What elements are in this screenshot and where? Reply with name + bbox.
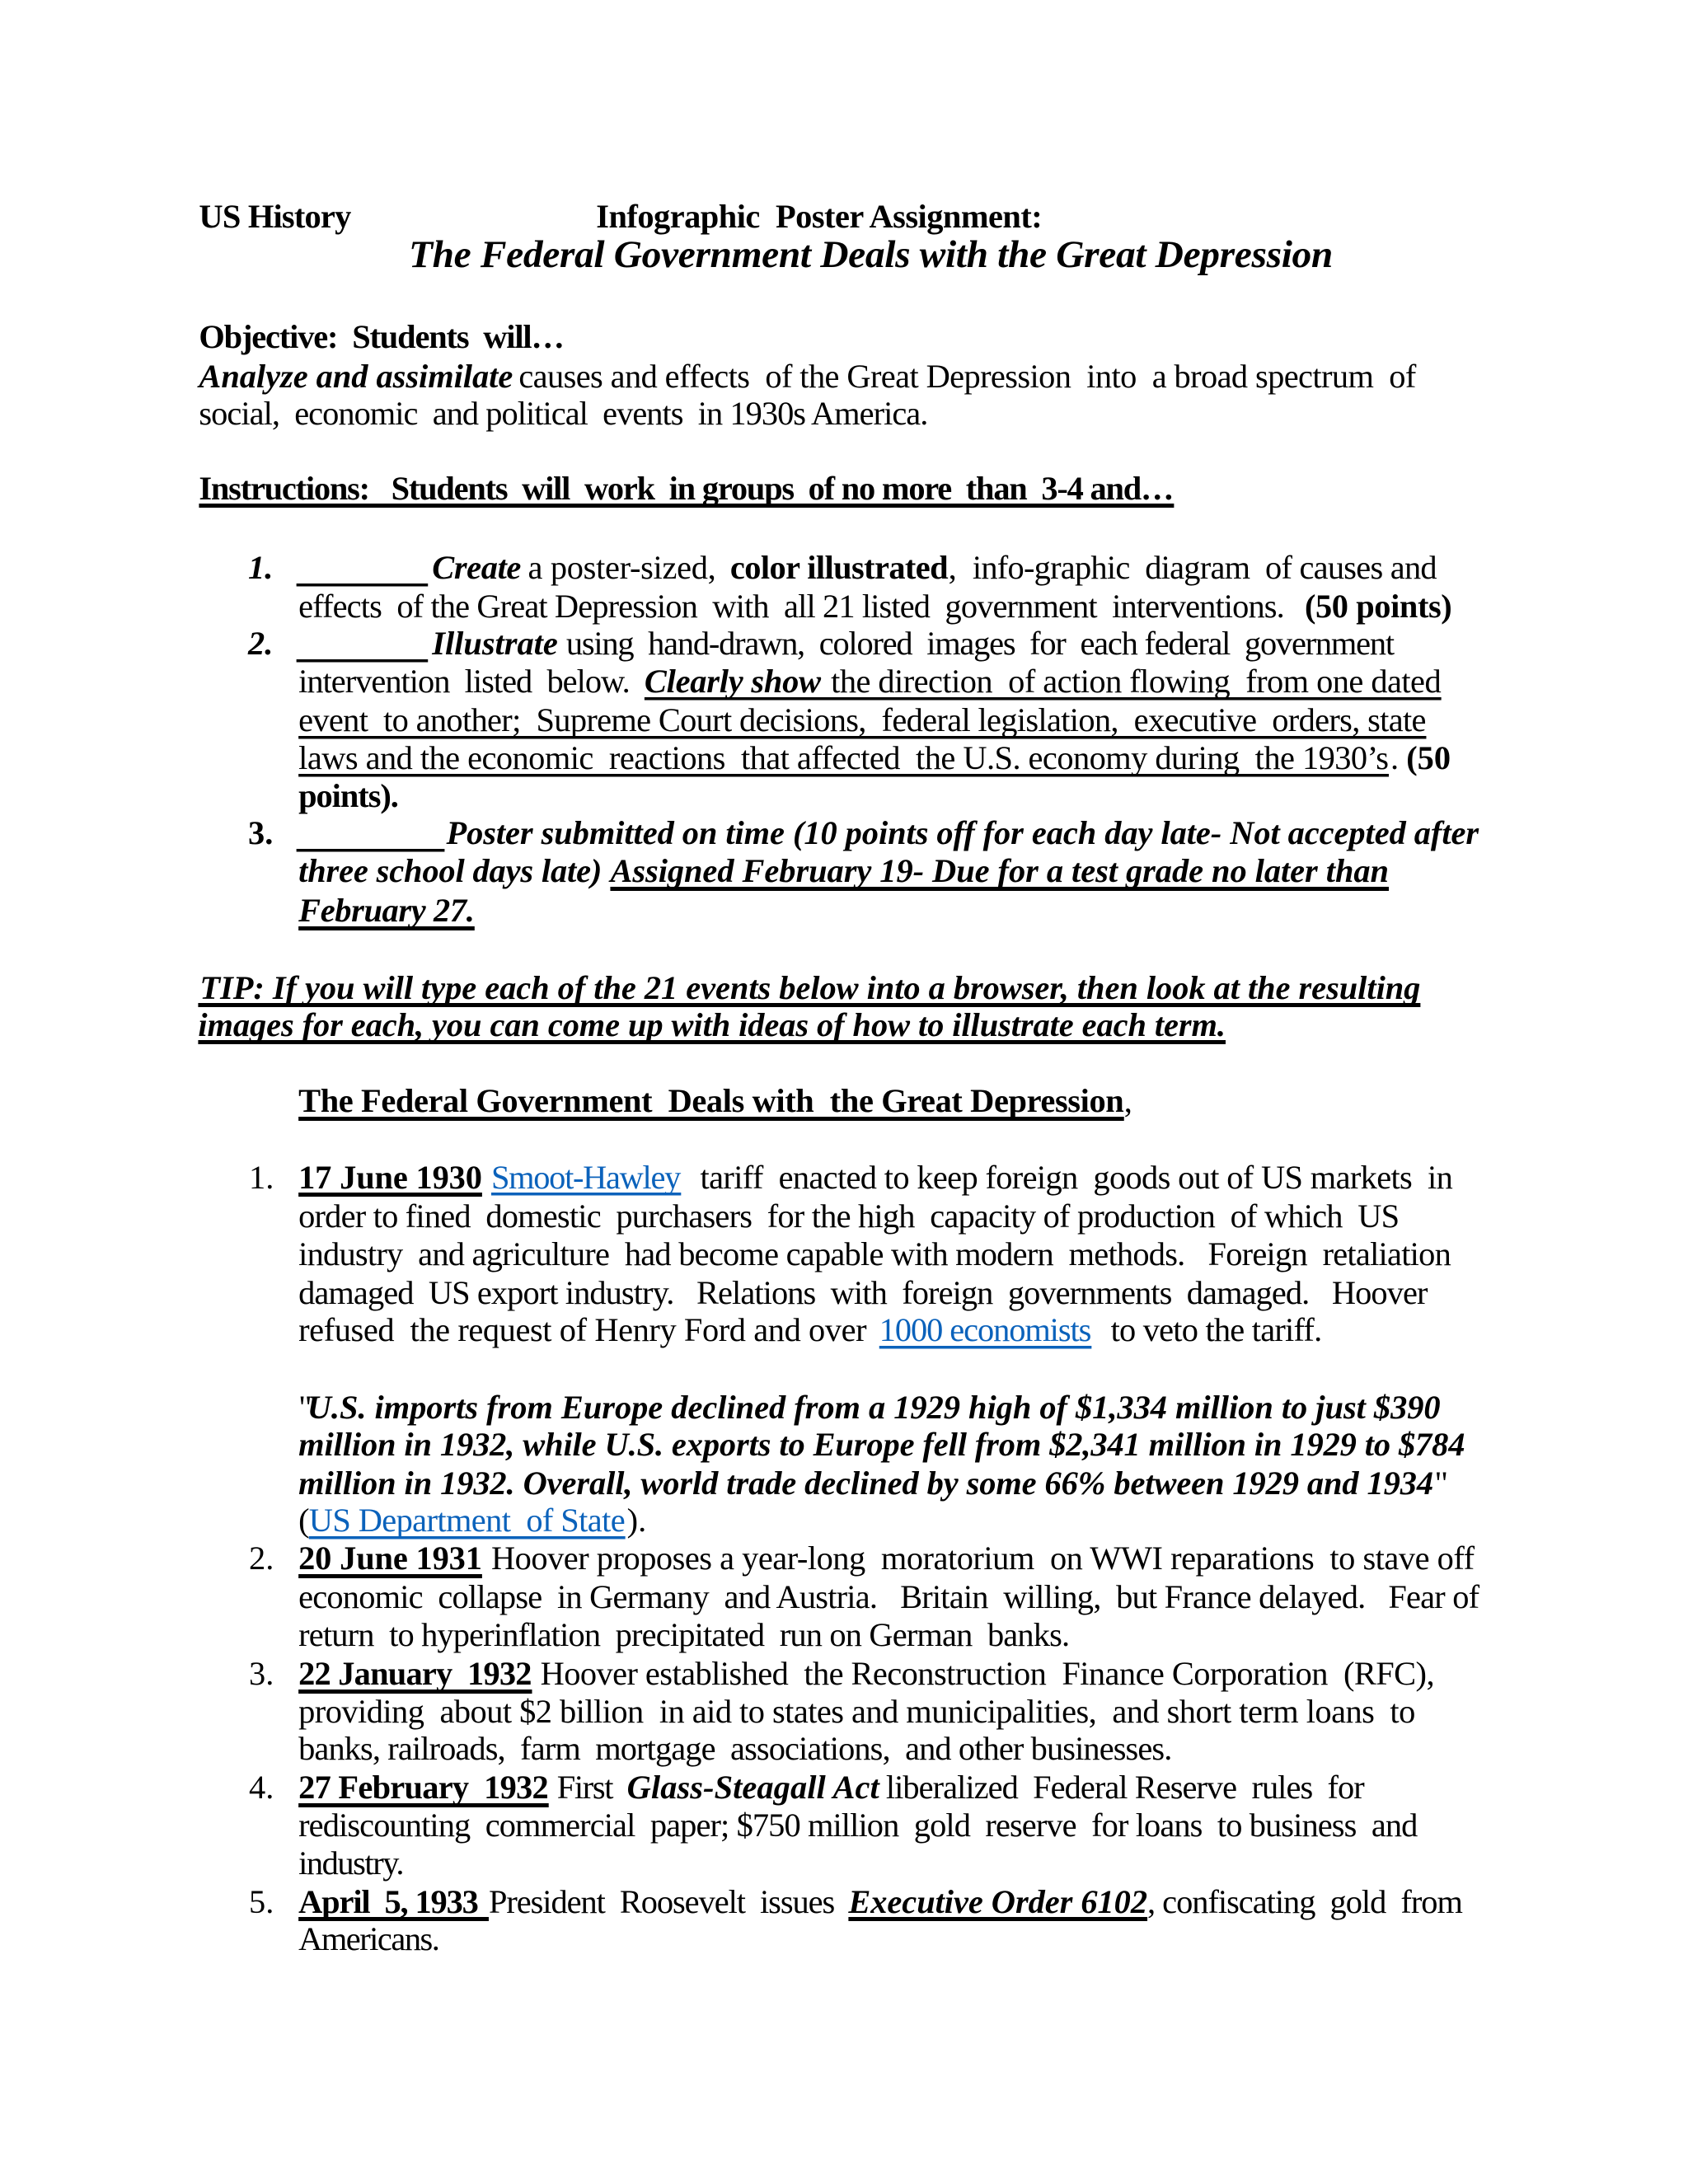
tip callout: images for each, you can come up with ideas of how to illustrate each term.: [198, 1006, 1226, 1043]
event 2: Hoover moratorium: 2.: [249, 1540, 274, 1577]
event 2: Hoover moratorium: 20 June 1931: [298, 1540, 482, 1577]
event 4: Glass-Steagall Act: Glass-Steagall Act: [627, 1769, 881, 1806]
instruction 2: illustrate events: laws and the economic reactions that affected the U.S. economy during the 1930’s: [298, 739, 1389, 776]
tip callout: [198, 969, 1420, 1044]
instruction 1: create poster: [248, 549, 1452, 625]
instruction 2: illustrate events: 2.: [247, 625, 273, 662]
event 1: Smoot-Hawley tariff: 1000 economists: [879, 1311, 1091, 1348]
event 3: Reconstruction Finance Corporation: banks, railroads, farm mortgage associations, and other businesses.: [298, 1730, 1172, 1767]
event 5: Executive Order 6102: President Roosevelt issues: [489, 1883, 835, 1920]
event 1: Smoot-Hawley tariff: order to fined domestic purchasers for the high capacity of production of which US: [298, 1197, 1400, 1235]
event 1: Smoot-Hawley tariff: industry and agriculture had become capable with modern methods. Foreign retaliation: [298, 1235, 1451, 1272]
event 1: Smoot-Hawley tariff: refused the request of Henry Ford and over: [298, 1311, 867, 1348]
tip callout: TIP: If you will type each of the 21 events below into a browser, then look at the resulting: [199, 969, 1420, 1006]
event 1: Smoot-Hawley tariff: damaged US export industry. Relations with foreign governments damaged. Hoover: [298, 1274, 1428, 1311]
page content: [196, 198, 1480, 1957]
instruction 2: illustrate events: event to another; Supreme Court decisions, federal legislation, executive orders, state: [298, 701, 1426, 738]
event 2: Hoover moratorium: return to hyperinflation precipitated run on German banks.: [298, 1616, 1070, 1653]
instruction 2: illustrate events: Clearly show: [645, 663, 821, 700]
instruction 2: illustrate events: Illustrate: [431, 625, 558, 662]
instructions heading: Instructions: Students will work in groups of no more than 3-4 and…: [199, 470, 1174, 507]
instruction 2: illustrate events: using hand-drawn, colored images for each federal government: [566, 625, 1395, 662]
quotation: trade statistics: million in 1932. Overall, world trade declined by some 66% between 1929 and 1934: [298, 1465, 1433, 1502]
instruction 2: illustrate events: [247, 625, 1451, 814]
quotation: trade statistics: million in 1932, while U.S. exports to Europe fell from $2,341 million in 1929 to $784: [298, 1426, 1465, 1463]
instruction 1: create poster: 1.: [248, 549, 273, 586]
instruction 1: create poster: Create: [432, 549, 521, 586]
quotation: trade statistics: US Department of State: [309, 1502, 626, 1539]
list heading: The Federal Government Deals with the Great Depression: [298, 1082, 1124, 1119]
event 2: Hoover moratorium: Hoover proposes a year-long moratorium on WWI reparations to stave off: [491, 1540, 1475, 1577]
header: course and assignment title: Infographic Poster Assignment:: [596, 198, 1043, 235]
header: course and assignment title: US History: [199, 198, 351, 235]
event 4: Glass-Steagall Act: [249, 1769, 1418, 1882]
event 1: Smoot-Hawley tariff: to veto the tariff.: [1111, 1311, 1322, 1348]
objective section: social, economic and political events in 1930s America.: [199, 395, 928, 432]
event 4: Glass-Steagall Act: 4.: [249, 1769, 274, 1806]
event 5: Executive Order 6102: Executive Order 6102: [847, 1883, 1147, 1920]
quotation: trade statistics: ).: [627, 1502, 646, 1539]
instruction 1: create poster: info-graphic diagram of causes and: [973, 549, 1437, 586]
instruction 2: illustrate events: points).: [298, 777, 399, 814]
instruction 1: create poster: (50 points): [1305, 588, 1452, 625]
instruction 2: illustrate events: the direction of action flowing from one dated: [831, 663, 1442, 700]
event 2: Hoover moratorium: [249, 1540, 1480, 1653]
instruction 2: illustrate events: intervention listed below.: [298, 663, 631, 700]
event 3: Reconstruction Finance Corporation: 22 January 1932: [298, 1655, 532, 1692]
instruction 2: illustrate events: (50: [1406, 739, 1451, 776]
instruction 1: create poster: color illustrated: [730, 549, 949, 586]
instruction 3: deadline: 3.: [248, 814, 273, 851]
event 3: Reconstruction Finance Corporation: [249, 1655, 1435, 1767]
list heading: ,: [1124, 1082, 1132, 1119]
instruction 3: deadline: February 27.: [298, 892, 475, 929]
objective section: Analyze and assimilate: [196, 358, 513, 395]
quotation: trade statistics: ": [1435, 1465, 1448, 1502]
event 5: Executive Order 6102: 5.: [249, 1883, 274, 1920]
instruction 3: deadline: Assigned February 19- Due for a test grade no later than: [607, 852, 1389, 889]
quotation: trade statistics: (: [298, 1502, 310, 1539]
objective section: causes and effects of the Great Depression into a broad spectrum of: [518, 358, 1417, 395]
quotation: trade statistics: ": [298, 1389, 312, 1426]
event 1: Smoot-Hawley tariff: 17 June 1930: [298, 1159, 482, 1196]
event 3: Reconstruction Finance Corporation: Hoover established the Reconstruction Finance Corporation (RFC),: [541, 1655, 1435, 1692]
event 4: Glass-Steagall Act: industry.: [298, 1844, 404, 1882]
instruction 2: illustrate events: .: [1390, 739, 1399, 776]
instruction 1: create poster: a poster-sized,: [528, 549, 716, 586]
quotation: trade statistics: [298, 1389, 1465, 1540]
objective section: Objective: Students will…: [199, 318, 565, 355]
instruction 3: deadline: [248, 814, 1479, 930]
event 5: Executive Order 6102: April 5, 1933: [298, 1883, 479, 1920]
event 3: Reconstruction Finance Corporation: 3.: [249, 1655, 274, 1692]
objective section: [196, 318, 1417, 432]
event 3: Reconstruction Finance Corporation: providing about $2 billion in aid to states and municipalities, and short term loans to: [298, 1693, 1415, 1730]
event 1: Smoot-Hawley tariff: 1.: [249, 1159, 274, 1196]
event 5: Executive Order 6102: , confiscating gold from: [1147, 1883, 1463, 1920]
event 1: Smoot-Hawley tariff: Smoot-Hawley: [491, 1159, 681, 1196]
quotation: trade statistics: U.S. imports from Europe declined from a 1929 high of $1,334 million to just $390: [307, 1389, 1441, 1426]
event 5: Executive Order 6102: [249, 1883, 1463, 1957]
instruction 3: deadline: three school days late): [298, 852, 602, 889]
event 1: Smoot-Hawley tariff: tariff enacted to keep foreign goods out of US markets in: [701, 1159, 1453, 1196]
event 4: Glass-Steagall Act: liberalized Federal Reserve rules for: [886, 1769, 1365, 1806]
header: course and assignment title: [199, 198, 1333, 276]
event 5: Executive Order 6102: Americans.: [298, 1920, 440, 1957]
event 4: Glass-Steagall Act: rediscounting commercial paper; $750 million gold reserve for loans to business and: [298, 1807, 1418, 1844]
event 4: Glass-Steagall Act: First: [557, 1769, 613, 1806]
event 1: Smoot-Hawley tariff: [249, 1159, 1453, 1348]
instruction 1: create poster: effects of the Great Depression with all 21 listed government interventions.: [298, 588, 1285, 625]
instruction 1: create poster: ,: [949, 549, 957, 586]
instruction 3: deadline: Poster submitted on time (10 points off for each day late- Not accepted after: [445, 814, 1479, 851]
event 4: Glass-Steagall Act: 27 February 1932: [298, 1769, 549, 1806]
event 2: Hoover moratorium: economic collapse in Germany and Austria. Britain willing, but France delayed. Fear of: [298, 1578, 1480, 1615]
header: course and assignment title: The Federal Government Deals with the Great Depression: [409, 233, 1333, 276]
